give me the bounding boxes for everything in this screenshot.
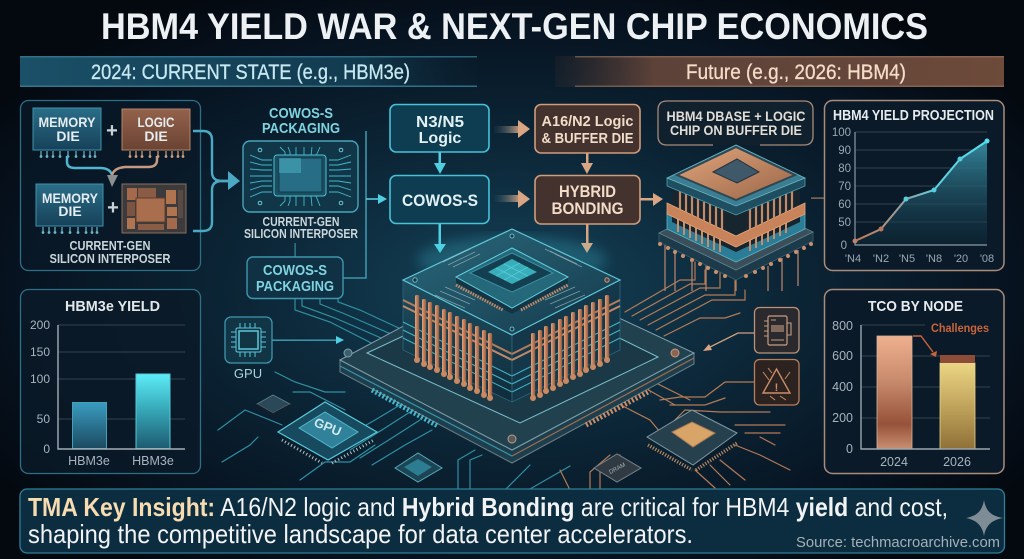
plus sign: + — [106, 120, 118, 142]
source: Source: techmacroarchive.com — [796, 534, 1000, 551]
interposer caption: CURRENT-GEN — [262, 215, 340, 229]
header band: future 2026 — [555, 56, 1004, 87]
dark interior — [672, 186, 800, 252]
panel: current-gen dies — [20, 100, 200, 270]
x axis labels: 'N2 — [873, 253, 889, 265]
title: HBM4 YIELD WAR & NEXT-GEN CHIP ECONOMICS — [101, 6, 928, 47]
y axis labels: 800 — [832, 319, 853, 333]
connector to CoWoS-S box — [343, 131, 387, 278]
blue layer — [667, 212, 805, 262]
upper micro-bump columns — [680, 190, 792, 229]
y axis labels: 100 — [30, 372, 50, 386]
x axis labels: 2024 — [880, 455, 908, 469]
merge arrow — [67, 156, 157, 187]
y axis labels: 60 — [838, 199, 851, 211]
logic die top: DIE — [144, 128, 168, 144]
x axis labels: 2026 — [943, 455, 971, 469]
memory die top — [33, 108, 101, 158]
box: A16/N2 logic and buffer die: & BUFFER DIE — [542, 131, 634, 147]
y axis labels: 100 — [832, 127, 851, 139]
arrow: GPU to main chip — [272, 336, 344, 344]
pin lines — [665, 245, 798, 291]
arrow: hybrid bonding to HBM4 stack — [640, 193, 663, 206]
card: silicon interposer chip — [243, 141, 358, 212]
arrow: hybrid bonding down to main chip — [581, 224, 593, 253]
illustration: HBM4 stacked die — [658, 145, 813, 291]
chip: GPU bottom left: GPU — [312, 415, 344, 439]
callout: HBM4 DBASE plus logic chip — [658, 101, 813, 145]
callout: HBM4 DBASE plus logic chip: CHIP ON BUFFER DIE — [670, 123, 802, 138]
box: hybrid bonding: BONDING — [552, 200, 624, 218]
box: CoWoS-S: COWOS-S — [402, 191, 478, 210]
x axis labels — [845, 253, 994, 265]
callout: HBM4 DBASE plus logic chip: HBM4 DBASE + LOGIC — [666, 109, 806, 124]
y axis labels — [30, 318, 50, 456]
insight bar — [20, 489, 1004, 553]
y axis labels: 0 — [841, 240, 847, 252]
axes — [58, 325, 185, 449]
chip: small top left — [257, 395, 290, 416]
chip: DRAM lower: DRAM — [608, 462, 627, 476]
bar — [136, 374, 170, 448]
x axis labels: '08 — [980, 253, 994, 265]
arrow: A16 to hybrid bonding — [581, 153, 593, 174]
base layer — [658, 195, 813, 280]
logic die floorplan — [122, 184, 186, 233]
heading: CoWoS-S packaging — [262, 105, 340, 137]
challenges arrow — [913, 336, 937, 357]
edge connector copper — [586, 391, 650, 425]
plus sign: + — [107, 197, 119, 219]
illustration: main chip package — [340, 229, 694, 463]
panel: HBM4 yield projection chart — [824, 100, 1004, 270]
box: N3/N5 logic: N3/N5 — [416, 114, 464, 131]
challenges label: Challenges — [931, 321, 989, 335]
circuit traces: copper right side — [560, 262, 790, 490]
connector: stack to yield chart — [811, 198, 824, 199]
arrow: N3/N5 to A16 — [494, 120, 530, 138]
bar 2024 — [877, 336, 912, 449]
memory die bottom — [36, 184, 103, 234]
copper band — [667, 203, 805, 247]
panel: TCO by node chart — [824, 290, 1004, 474]
y axis labels: 0 — [846, 442, 853, 456]
top plate — [667, 178, 805, 215]
x axis labels: HBM3e — [132, 454, 174, 468]
y axis labels: 50 — [37, 412, 50, 426]
box: hybrid bonding: HYBRID — [559, 183, 616, 201]
interposer caption: SILICON INTERPOSER — [244, 227, 358, 241]
grid — [861, 325, 990, 418]
chip: copper lower right — [647, 410, 737, 470]
logic die top — [122, 109, 190, 158]
x axis labels — [880, 455, 971, 469]
bar — [72, 402, 106, 448]
icon: GPU — [225, 317, 272, 363]
insight text line 2: shaping the competitive landscape for data center accelerators. — [28, 519, 693, 549]
y axis labels — [832, 127, 851, 252]
area and line — [855, 141, 987, 245]
chip: DRAM lower — [594, 454, 641, 482]
x axis labels: 'N4 — [845, 253, 861, 265]
heading: CoWoS-S packaging: COWOS-S — [269, 105, 333, 122]
x axis labels: '20 — [954, 253, 968, 265]
top die — [713, 159, 759, 183]
bar 2026 — [940, 355, 975, 449]
memory die bottom: DIE — [58, 203, 82, 219]
y axis labels: 400 — [832, 380, 853, 394]
interposer label: CURRENT-GEN — [70, 238, 150, 253]
edge connector teal — [372, 390, 438, 426]
arrow: CoWoS-S down to main chip — [434, 224, 446, 253]
y axis labels: 90 — [838, 145, 851, 157]
GPU label: GPU — [234, 366, 262, 381]
box: N3/N5 logic: Logic — [419, 130, 461, 147]
y axis labels: 150 — [30, 345, 50, 359]
box: N3/N5 logic — [390, 104, 489, 152]
header band: 2024 current state: 2024: CURRENT STATE (e.g., HBM3e) — [91, 61, 410, 84]
box: CoWoS-S — [390, 176, 489, 224]
y axis labels: 200 — [832, 411, 853, 425]
y axis labels: 50 — [838, 217, 851, 229]
center die — [456, 248, 568, 314]
heading: CoWoS-S packaging: PACKAGING — [262, 120, 340, 137]
panel: HBM4 yield projection chart: HBM4 YIELD PROJECTION — [833, 108, 994, 124]
icon box: warning: ! — [775, 382, 778, 394]
interposer caption — [244, 215, 358, 241]
box: A16/N2 logic and buffer die: A16/N2 Logic — [542, 114, 634, 130]
y axis labels: 200 — [30, 318, 50, 332]
axes — [861, 325, 990, 449]
lower micro-bump columns — [678, 219, 786, 252]
tower left face — [403, 280, 512, 402]
logic die top: LOGIC — [138, 114, 174, 130]
arrow: CoWoS-S to hybrid bonding — [494, 190, 530, 208]
icon box: warning — [754, 360, 799, 405]
arrow: module to main chip — [703, 333, 754, 351]
panel: HBM3e yield chart — [20, 290, 200, 474]
icon box: chip module — [754, 308, 799, 353]
y axis labels — [832, 319, 853, 456]
grid — [58, 325, 185, 419]
icon: sparkle — [966, 500, 1003, 536]
axes — [855, 132, 987, 245]
y axis labels: 0 — [43, 442, 50, 456]
x axis labels: HBM3e — [68, 454, 110, 468]
memory die top: MEMORY — [38, 114, 96, 130]
circuit traces: teal left side — [218, 299, 570, 490]
memory die top: DIE — [56, 128, 80, 144]
grid — [855, 132, 987, 222]
panel: TCO by node chart: TCO BY NODE — [868, 298, 963, 315]
header band: 2024 current state — [20, 56, 477, 87]
arrow: N3/N5 down to CoWoS-S — [434, 152, 446, 174]
connector: caption to packaging box — [294, 243, 296, 257]
y axis labels: 80 — [838, 163, 851, 175]
y axis labels: 70 — [838, 181, 851, 193]
panel: HBM3e yield chart: HBM3e YIELD — [65, 298, 160, 315]
tower right face — [512, 280, 620, 402]
arrow: dies to CoWoS — [193, 131, 240, 231]
panel: current-gen dies: SILICON INTERPOSER — [50, 251, 171, 266]
copper pillars — [414, 295, 610, 401]
box: hybrid bonding — [535, 176, 640, 224]
chip: small lower — [395, 453, 442, 482]
box: CoWoS-S packaging — [247, 257, 343, 298]
substrate — [340, 236, 694, 463]
box: A16/N2 logic and buffer die — [535, 104, 640, 153]
box: CoWoS-S packaging: PACKAGING — [256, 278, 334, 295]
x axis labels: 'N5 — [899, 253, 915, 265]
tower top surface — [403, 229, 620, 335]
box: CoWoS-S packaging: COWOS-S — [263, 262, 327, 279]
x axis labels — [68, 454, 174, 468]
y axis labels: 600 — [832, 349, 853, 363]
chip: GPU bottom left — [278, 402, 377, 463]
header band: future 2026: Future (e.g., 2026: HBM4) — [686, 61, 906, 84]
memory die bottom: MEMORY — [42, 190, 99, 206]
x axis labels: 'N8 — [926, 253, 942, 265]
insight text line 1: TMA Key Insight: A16/N2 logic and Hybrid Bonding are critical for HBM4 yield and cost, — [28, 492, 948, 522]
